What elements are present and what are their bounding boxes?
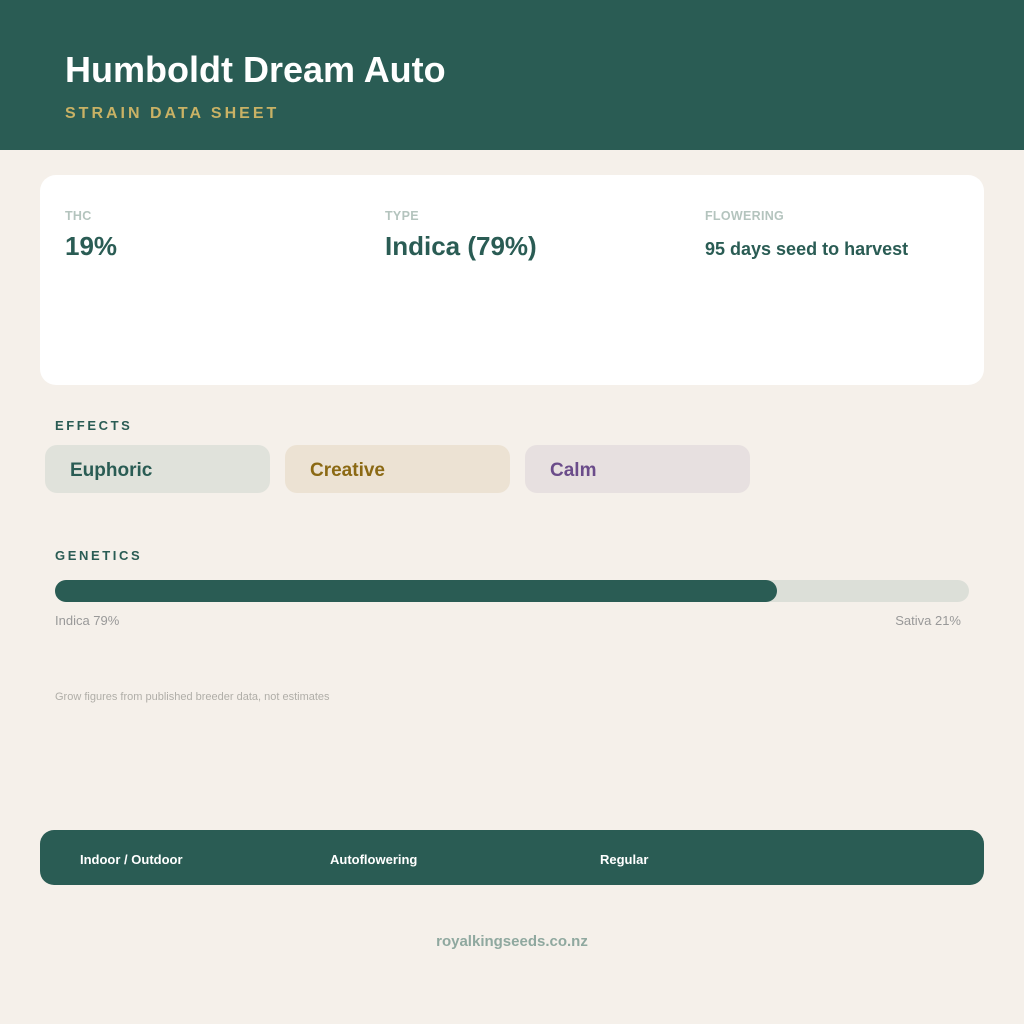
effect pill: Creative: [285, 445, 510, 493]
genetics bar chart: [55, 580, 969, 602]
heading: effects: EFFECTS: [55, 418, 132, 433]
subtitle: STRAIN DATA SHEET: [65, 105, 279, 122]
stat label: THC: THC: [65, 209, 92, 223]
effect pill: Creative: Creative: [310, 460, 385, 481]
title: Humboldt Dream Auto: [65, 49, 446, 90]
stat value: THC: 19%: [65, 231, 117, 261]
effect pill: Euphoric: [45, 445, 270, 493]
effect pill: Calm: Calm: [550, 460, 596, 481]
effect pill: Calm: [525, 445, 750, 493]
heading: genetics: GENETICS: [55, 548, 142, 563]
info: seed type: Regular: [600, 852, 648, 867]
info: environment: Indoor / Outdoor: [80, 852, 183, 867]
footnote: Grow figures from published breeder data, not estimates: [55, 691, 330, 703]
bar label: indica: Indica 79%: [55, 613, 119, 628]
panel: key stats: [40, 175, 984, 385]
stat label: flowering: FLOWERING: [705, 209, 784, 223]
stat value: type: Indica (79%): [385, 231, 537, 261]
bar label: sativa: Sativa 21%: [895, 613, 961, 628]
website: royalkingseeds.co.nz: [436, 933, 588, 950]
effect pill: Euphoric: Euphoric: [70, 460, 152, 481]
indica bar fill: [55, 580, 777, 602]
stat value: flowering: 95 days seed to harvest: [705, 239, 908, 259]
header band: [0, 0, 1024, 150]
stat label: type: TYPE: [385, 209, 419, 223]
footer info bar: [40, 830, 984, 885]
info: flowering type: Autoflowering: [330, 852, 417, 867]
